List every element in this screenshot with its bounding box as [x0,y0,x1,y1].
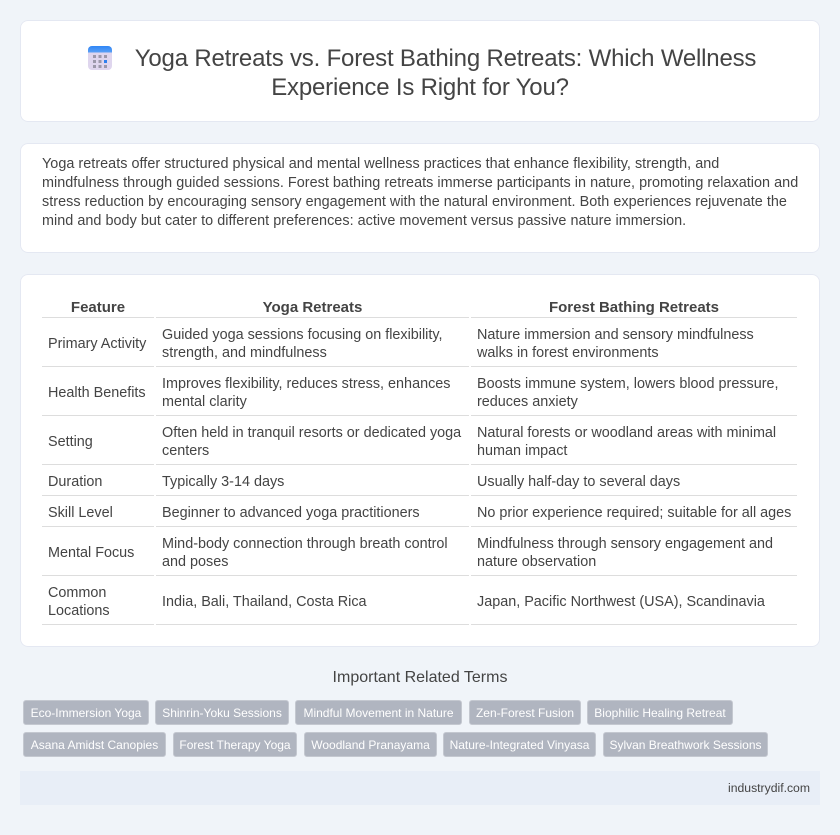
panel: comparison table: Nature immersion and sensory mindfulness [477,327,754,343]
panel: comparison table: Boosts immune system, lowers blood pressure, [477,376,779,392]
title [135,45,756,101]
panel: comparison table [20,274,820,647]
title: Yoga Retreats vs. Forest Bathing Retreats: Which Wellness [135,45,756,72]
panel: summary text: mindfulness through guided sessions. Forest bathing retreats immerse participants in nature, promoting relaxation and [42,175,798,191]
tag [603,732,768,757]
tag: Shinrin-Yoku Sessions [162,706,282,720]
panel: comparison table: Locations [48,603,110,619]
tag: Sylvan Breathwork Sessions [609,738,762,752]
tag [173,732,297,757]
panel: summary text [20,143,820,253]
panel: comparison table: Usually half-day to several days [477,474,680,490]
panel: comparison table: reduces anxiety [477,394,578,410]
panel: comparison table: Primary Activity [48,336,146,352]
panel: comparison table: Setting [48,434,93,450]
title: Experience Is Right for You? [271,74,569,101]
panel: comparison table: Guided yoga sessions focusing on flexibility, [162,327,443,343]
tag: Zen-Forest Fusion [476,706,574,720]
tag: Biophilic Healing Retreat [594,706,726,720]
panel: comparison table: Mindfulness through sensory engagement and [477,536,773,552]
panel: comparison table: Forest Bathing Retreats [549,298,719,316]
panel: comparison table: Japan, Pacific Northwest (USA), Scandinavia [477,594,765,610]
panel: comparison table: India, Bali, Thailand, Costa Rica [162,594,367,610]
heading: related terms: Important Related Terms [333,669,507,686]
icon: calendar [88,46,112,70]
tag [23,700,149,725]
panel: summary text: stress reduction by encouraging sensory engagement with the natural environment. Both experiences rejuvenate the [42,194,787,210]
panel: summary text: Yoga retreats offer structured physical and mental wellness practices that enhance flexibility, strength, and [42,156,719,172]
tag [304,732,437,757]
panel: comparison table: mental clarity [162,394,247,410]
panel: summary text: mind and body but cater to different preferences: active movement versus passive nature immersion. [42,213,686,229]
tag [295,700,462,725]
tag: Eco-Immersion Yoga [31,706,141,720]
panel: comparison table: Mental Focus [48,545,134,561]
panel: comparison table: Feature [71,298,125,316]
panel: comparison table: Beginner to advanced yoga practitioners [162,505,420,521]
tag: Asana Amidst Canopies [31,738,158,752]
tag [443,732,596,757]
panel: comparison table: Improves flexibility, reduces stress, enhances [162,376,450,392]
panel: comparison table: Mind-body connection through breath control [162,536,448,552]
panel: comparison table: strength, and mindfulness [162,345,327,361]
panel: header [20,20,820,122]
panel: comparison table: nature observation [477,554,596,570]
panel: comparison table: Often held in tranquil resorts or dedicated yoga [162,425,461,441]
panel: comparison table: No prior experience required; suitable for all ages [477,505,791,521]
footer bar [20,771,820,805]
panel: comparison table: human impact [477,443,567,459]
panel: comparison table: Yoga Retreats [263,298,362,316]
panel: comparison table: Duration [48,474,102,490]
tag: Woodland Pranayama [311,738,430,752]
footer source text: industrydif.com [728,781,810,795]
panel: comparison table: Common [48,585,106,601]
tag [23,732,166,757]
panel: comparison table: Typically 3-14 days [162,474,284,490]
tag [587,700,733,725]
panel: comparison table: and poses [162,554,228,570]
tag [155,700,289,725]
tag: Nature-Integrated Vinyasa [450,738,589,752]
tag: Mindful Movement in Nature [303,706,454,720]
panel: comparison table: walks in forest environments [477,345,659,361]
tag: Forest Therapy Yoga [179,738,291,752]
panel: comparison table: Skill Level [48,505,113,521]
panel: comparison table: Natural forests or woodland areas with minimal [477,425,776,441]
tag group: related terms [23,700,768,757]
panel: comparison table: centers [162,443,209,459]
panel: comparison table: Health Benefits [48,385,146,401]
tag [469,700,581,725]
